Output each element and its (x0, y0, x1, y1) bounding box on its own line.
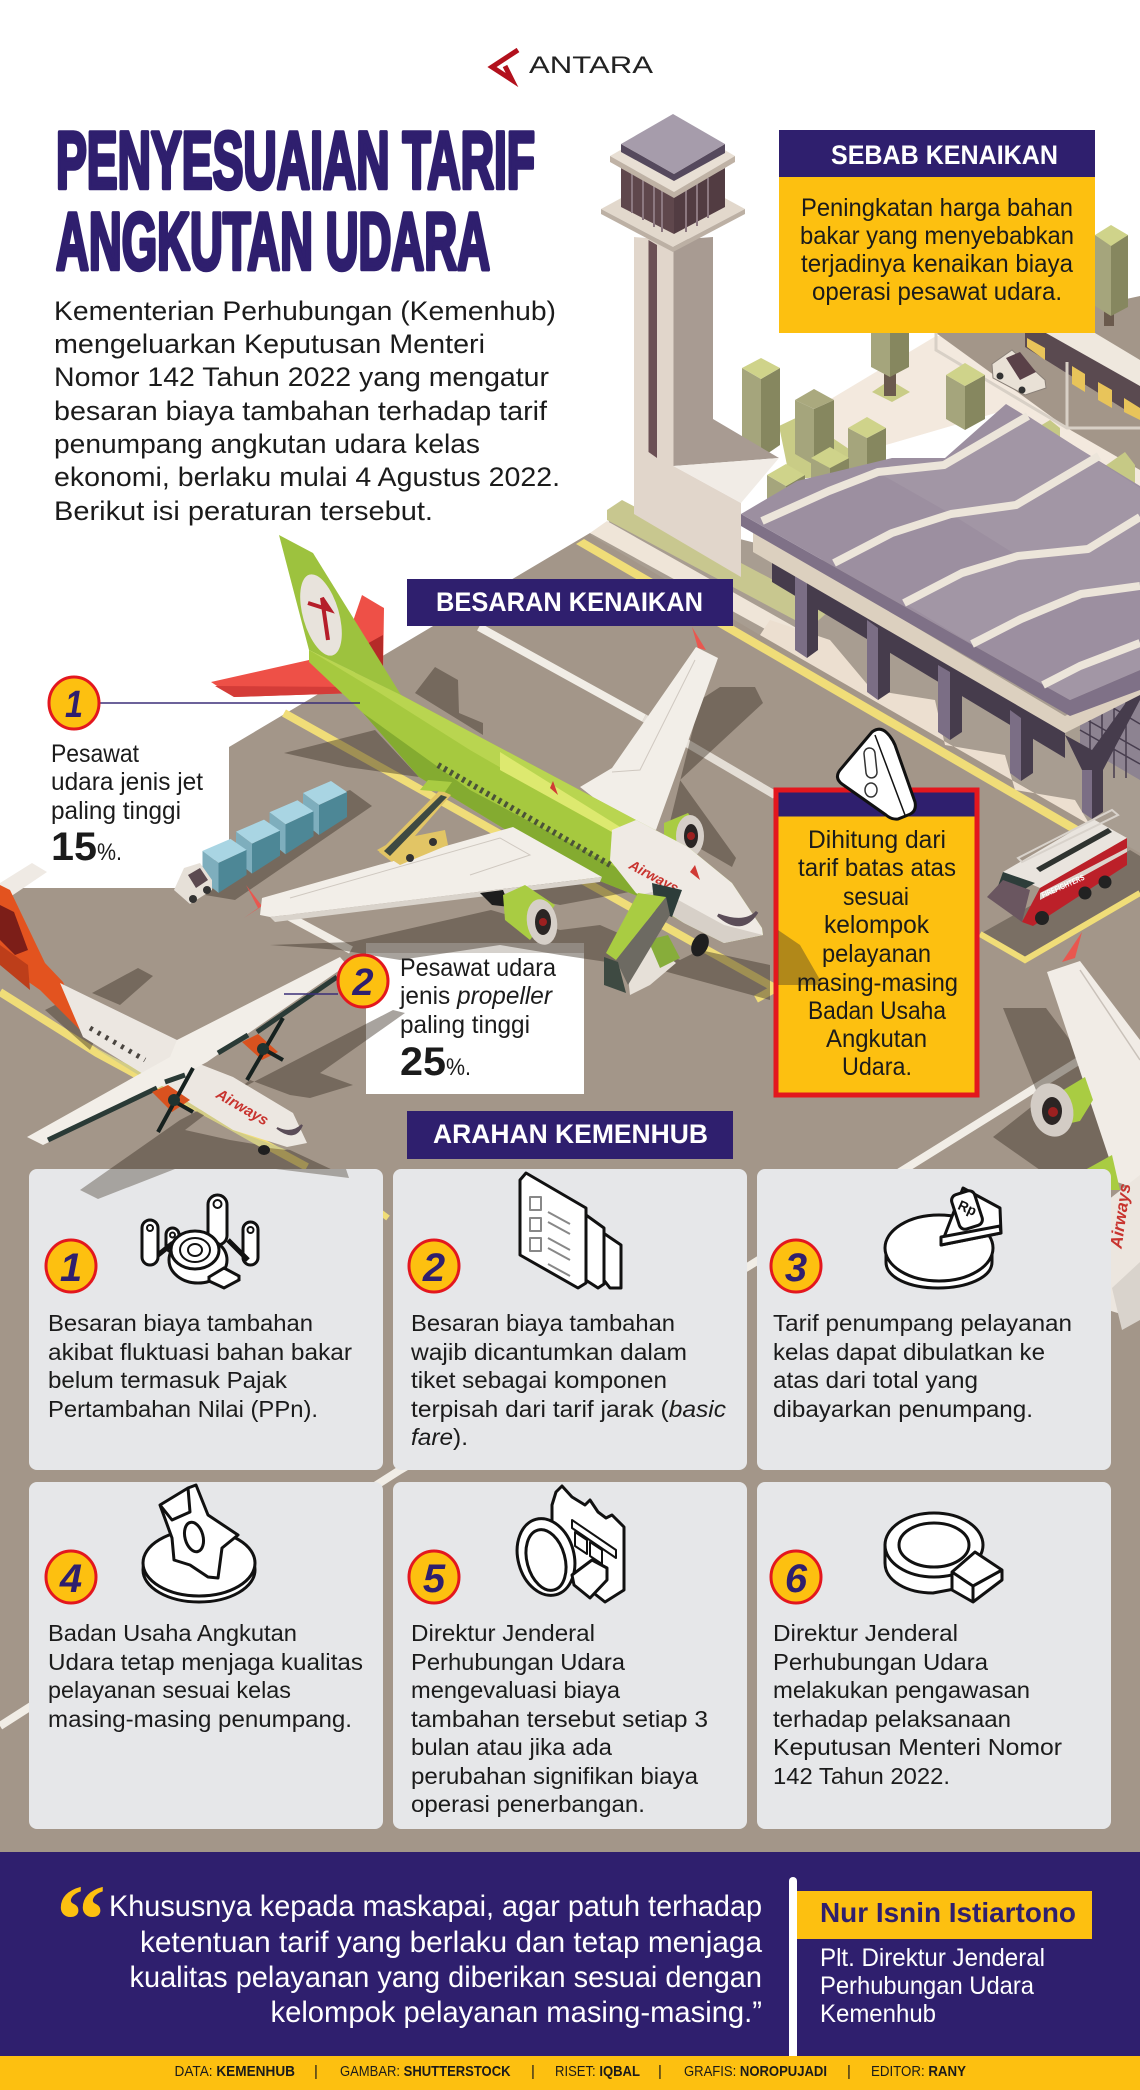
badge 1 (46, 1240, 96, 1292)
apron ground (0, 533, 1140, 1852)
callout 2: propeller: %. (446, 1054, 471, 1081)
speaker name (797, 1891, 1092, 1939)
nose (610, 820, 763, 943)
text 2 (410, 1310, 727, 1450)
text: warning callout: Badan Usaha (808, 997, 946, 1025)
icon: magnifier and calendar (509, 1486, 624, 1602)
terminal floor and apron strips (576, 500, 1140, 872)
panel: white background for propeller note (366, 943, 584, 1094)
passenger bridge (604, 883, 682, 995)
icon: documents (520, 1173, 621, 1288)
text 4: masing-masing penumpang. (48, 1706, 352, 1732)
text 6: Keputusan Menteri Nomor (773, 1734, 1062, 1760)
parking pad (980, 850, 1140, 960)
text 2: tiket sebagai komponen (411, 1367, 667, 1393)
footer credits: | (847, 2063, 851, 2080)
baggage train (174, 781, 347, 904)
text: warning callout: Dihitung dari (808, 826, 946, 854)
footer credits: | (314, 2063, 318, 2080)
text 5: perubahan signifikan biaya (411, 1763, 698, 1789)
callout 1: jet (49, 677, 360, 869)
text 4: Udara tetap menjaga kualitas (48, 1649, 363, 1675)
card 6 (757, 1482, 1111, 1829)
speaker role: Plt. Direktur Jenderal (820, 1944, 1045, 1972)
text: sebab kenaikan: operasi pesawat udara. (812, 278, 1062, 306)
title: ANGKUTAN UDARA (56, 197, 490, 287)
badge 2: 2 (422, 1246, 445, 1290)
intro paragraph: ekonomi, berlaku mulai 4 Agustus 2022. (54, 462, 560, 492)
badge 6 (771, 1551, 821, 1603)
text: warning callout (797, 826, 958, 1081)
callout 1: jet: paling tinggi (51, 797, 181, 825)
heading: besaran kenaikan: BESARAN KENAIKAN (436, 587, 703, 617)
green airplane: Airways (626, 856, 682, 896)
callout 2: propeller: paling tinggi (400, 1011, 530, 1039)
text 5 (411, 1620, 708, 1817)
card 4 (29, 1482, 383, 1829)
text 6: Direktur Jenderal (773, 1620, 958, 1646)
footer credits: GAMBAR: SHUTTERSTOCK (340, 2063, 511, 2080)
panel: sebab kenaikan (779, 130, 1095, 333)
intro paragraph: penumpang angkutan udara kelas (54, 429, 480, 459)
text 3: Tarif penumpang pelayanan (773, 1310, 1072, 1336)
text: warning callout: Udara. (842, 1053, 912, 1081)
near engine (480, 885, 561, 947)
text 3: atas dari total yang (773, 1367, 978, 1393)
icon: fuel filter parts (142, 1195, 258, 1288)
text 6 (773, 1620, 1062, 1789)
text 2: terpisah dari tarif jarak ( basic (411, 1396, 727, 1422)
text 6: Perhubungan Udara (773, 1649, 988, 1675)
icon: quality star on disc (143, 1485, 255, 1602)
footer credits: | (658, 2063, 662, 2080)
tail (351, 595, 384, 673)
footer credits: EDITOR: RANY (871, 2063, 966, 2080)
text 2: fare). (411, 1424, 468, 1450)
intro paragraph: Kementerian Perhubungan (Kemenhub) (54, 296, 556, 326)
fire truck: FIREFIGHTERS (1040, 873, 1086, 900)
fire truck (987, 810, 1127, 926)
callout 2: propeller: 2 (351, 962, 374, 1004)
speaker role: Kemenhub (820, 2000, 936, 2028)
text 1: Besaran biaya tambahan (48, 1310, 313, 1336)
footer credits: | (531, 2063, 535, 2080)
car (992, 350, 1046, 395)
text 6: 142 Tahun 2022. (773, 1763, 950, 1789)
text 5: mengevaluasi biaya (411, 1677, 620, 1703)
text: warning callout: sesuai (843, 883, 909, 911)
icon: warning triangle (837, 729, 915, 819)
bus (1025, 333, 1140, 420)
panel: warning callout (776, 729, 977, 1095)
control tower (601, 114, 779, 577)
callout 2: propeller (284, 954, 556, 1084)
tail logo (292, 570, 350, 660)
text 3: kelas dapat dibulatkan ke (773, 1339, 1045, 1365)
far wing (580, 627, 718, 857)
right plane shadow and wing: Airways (1106, 1182, 1134, 1251)
left airplane: Airways (212, 1085, 271, 1129)
logo: ANTARA (529, 52, 653, 79)
city background behind the tower (779, 296, 1140, 520)
text: warning callout: masing-masing (797, 969, 958, 997)
intro paragraph: besaran biaya tambahan terhadap tarif (54, 396, 548, 426)
left plane shadows (45, 968, 405, 1192)
text 5: bulan atau jika ada (411, 1734, 612, 1760)
text 4: pelayanan sesuai kelas (48, 1677, 291, 1703)
text 4: Badan Usaha Angkutan (48, 1620, 297, 1646)
callout 1: jet: 15 (51, 825, 97, 869)
speaker name: Nur Isnin Istiartono (820, 1897, 1076, 1928)
badge 2 (409, 1240, 459, 1292)
text: sebab kenaikan: Peningkatan harga bahan (801, 194, 1073, 222)
text 5: Direktur Jenderal (411, 1620, 595, 1646)
trees (742, 225, 1135, 510)
icon: magnifier (885, 1513, 1002, 1602)
badge 6: 6 (785, 1557, 808, 1601)
title (56, 116, 535, 287)
intro paragraph (54, 296, 560, 526)
logo (492, 50, 653, 80)
text 2: wajib dicantumkan dalam (410, 1339, 687, 1365)
text 4 (48, 1620, 363, 1732)
icon: pie with rupiah tag (885, 1188, 1001, 1288)
text 1: akibat fluktuasi bahan bakar (48, 1339, 352, 1365)
terminal building (741, 404, 1140, 819)
footer credits (0, 2056, 1140, 2090)
belt loader (377, 780, 452, 865)
callout 1: jet: udara jenis jet (51, 768, 203, 796)
text 6: terhadap pelaksanaan (773, 1706, 1011, 1732)
panel: quote band (0, 1852, 1140, 2062)
badge 5 (409, 1551, 459, 1603)
footer credits: DATA: KEMENHUB (174, 2063, 295, 2080)
badge 4: 4 (59, 1557, 82, 1601)
quote text: Khususnya kepada maskapai, agar patuh terhadap (109, 1890, 762, 1923)
green plane shadows (205, 667, 770, 1000)
icon: pie with rupiah tag: Rp (956, 1197, 979, 1219)
callout 1: jet: 1 (65, 684, 83, 726)
title: PENYESUAIAN TARIF (56, 116, 535, 206)
speaker role (820, 1944, 1045, 2028)
apron markings (0, 627, 1080, 1726)
near wing (244, 827, 602, 922)
text: sebab kenaikan: terjadinya kenaikan biaya (801, 250, 1073, 278)
quote text (109, 1890, 762, 2029)
badge 3 (771, 1240, 821, 1292)
text 3: dibayarkan penumpang. (773, 1396, 1033, 1422)
fuselage (309, 650, 763, 943)
text 5: tambahan tersebut setiap 3 (411, 1706, 708, 1732)
intro paragraph: mengeluarkan Keputusan Menteri (54, 329, 485, 359)
badge 5: 5 (423, 1557, 446, 1601)
card 3 (757, 1169, 1111, 1470)
text 2: Besaran biaya tambahan (411, 1310, 675, 1336)
left airplane (0, 863, 347, 1155)
callout 2: propeller: 25 (400, 1040, 446, 1084)
text: warning callout: kelompok (824, 911, 929, 939)
callout 1: jet: %. (97, 839, 122, 866)
heading: sebab kenaikan: SEBAB KENAIKAN (831, 140, 1058, 170)
speaker role: Perhubungan Udara (820, 1972, 1034, 2000)
badge 1: 1 (60, 1246, 82, 1290)
text 1: belum termasuk Pajak (48, 1367, 288, 1393)
text 5: Perhubungan Udara (411, 1649, 625, 1675)
text: warning callout: tarif batas atas (798, 854, 956, 882)
badge 4 (46, 1551, 96, 1603)
icon: quotation mark: “ (56, 1864, 106, 1975)
text: sebab kenaikan (800, 194, 1074, 306)
heading: arahan kemenhub (407, 1111, 733, 1159)
right plane shadow and wing (993, 932, 1140, 1330)
text: warning callout: Angkutan (826, 1025, 927, 1053)
heading: besaran kenaikan (407, 579, 733, 626)
badge 3: 3 (785, 1246, 807, 1290)
footer credits: RISET: IQBAL (555, 2063, 640, 2080)
text 1: Pertambahan Nilai (PPn). (48, 1396, 318, 1422)
callout 1: jet: Pesawat (51, 740, 139, 768)
green airplane (211, 535, 763, 959)
callout 2: propeller: jenis propeller (399, 982, 554, 1010)
card 2 (393, 1169, 747, 1470)
quote text: kualitas pelayanan yang diberikan sesuai dengan (130, 1961, 762, 1994)
text 5: operasi penerbangan. (411, 1791, 645, 1817)
text 3 (773, 1310, 1072, 1422)
footer credits: GRAFIS: NOROPUJADI (684, 2063, 827, 2080)
card 5 (393, 1482, 747, 1829)
text: warning callout: pelayanan (822, 940, 931, 968)
quote text: kelompok pelayanan masing-masing.” (270, 1996, 762, 2029)
intro paragraph: Berikut isi peraturan tersebut. (54, 496, 433, 526)
text: sebab kenaikan: bakar yang menyebabkan (800, 222, 1074, 250)
text 6: melakukan pengawasan (773, 1677, 1030, 1703)
card 1 (29, 1169, 383, 1470)
callout 2: propeller: Pesawat udara (400, 954, 556, 982)
intro paragraph: Nomor 142 Tahun 2022 yang mengatur (54, 362, 549, 392)
heading: arahan kemenhub: ARAHAN KEMENHUB (433, 1119, 708, 1149)
quote text: ketentuan tarif yang berlaku dan tetap menjaga (140, 1926, 762, 1959)
text 1 (48, 1310, 352, 1422)
